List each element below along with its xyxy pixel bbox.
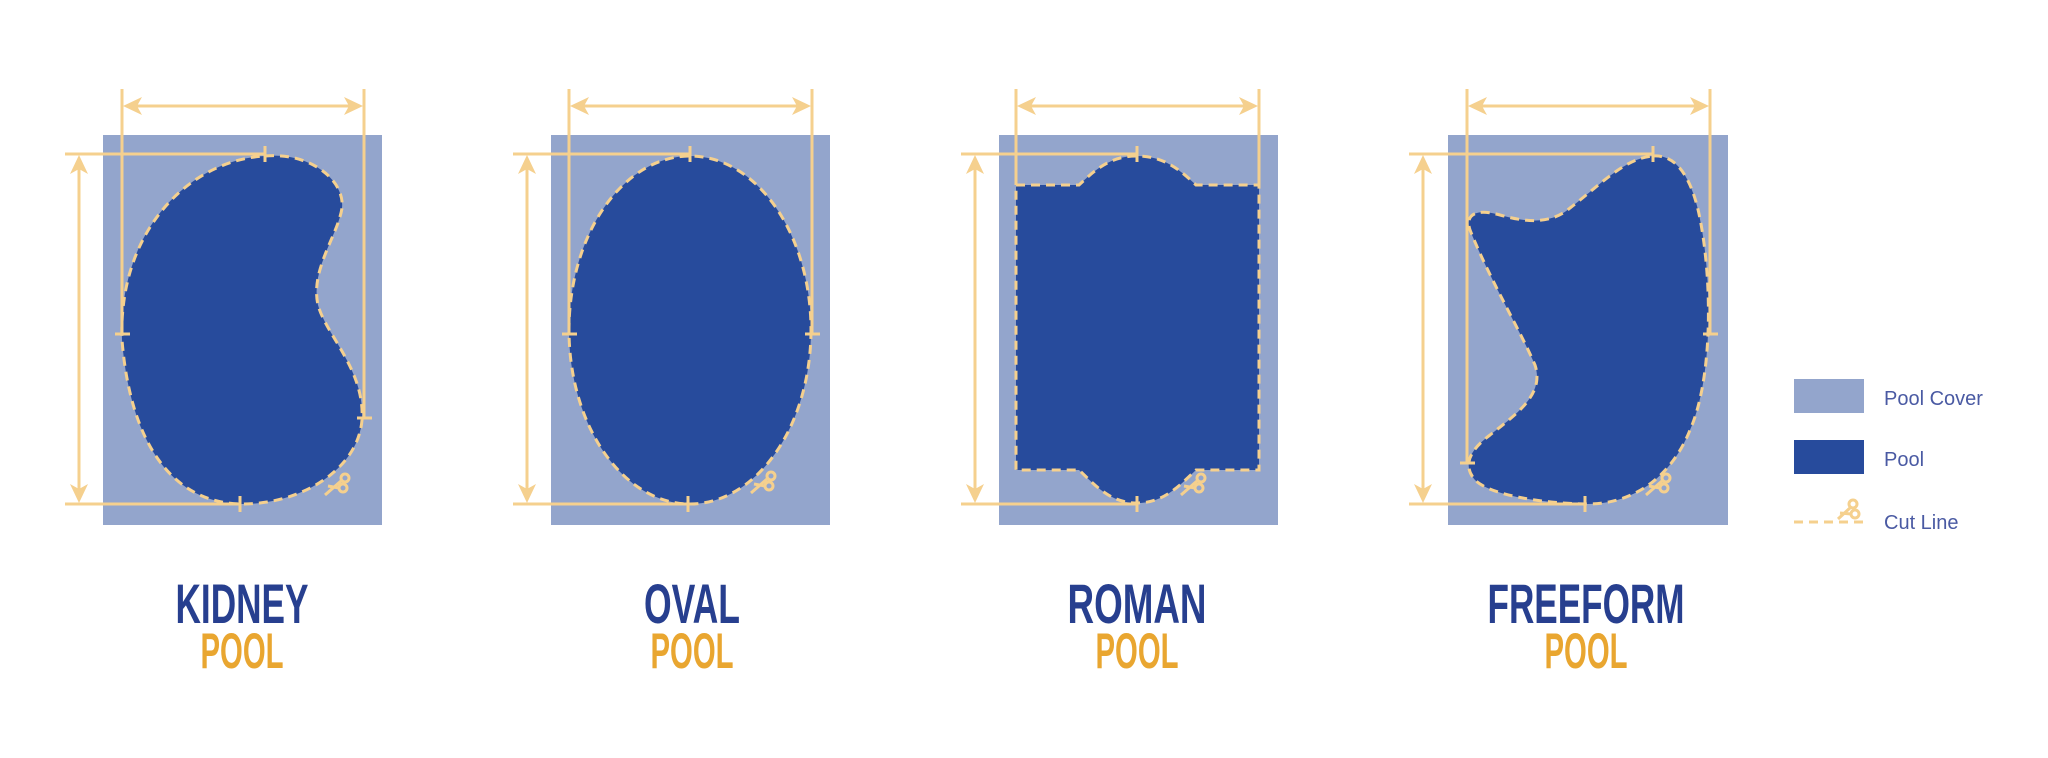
panel: kidney pool [65, 89, 382, 679]
cover rectangle [103, 135, 382, 525]
icon: scissors [1646, 474, 1670, 495]
roman pool shape [1016, 156, 1259, 503]
title: oval pool: POOL [650, 623, 734, 679]
oval pool shape [569, 156, 811, 504]
cover rectangle [1448, 135, 1728, 525]
title: oval pool [644, 572, 740, 679]
title: kidney pool: KIDNEY [176, 572, 308, 635]
title: oval pool: OVAL [644, 572, 740, 635]
width dimension arrow [1460, 89, 1718, 463]
legend: pool cover: Pool Cover [1884, 388, 1983, 410]
title: roman pool: POOL [1096, 623, 1178, 679]
legend: pool [1794, 440, 1924, 474]
legend: pool cover [1794, 379, 1983, 413]
height dimension arrow [65, 146, 265, 512]
icon: scissors [1181, 474, 1205, 495]
cover rectangle [551, 135, 830, 525]
width dimension arrow [115, 89, 372, 418]
title: freeform pool [1488, 572, 1684, 679]
height dimension arrow [961, 146, 1137, 512]
title: kidney pool: POOL [200, 623, 284, 679]
legend: cut line [1794, 500, 1958, 534]
legend [1794, 379, 1983, 534]
freeform pool shape [1469, 156, 1708, 504]
height dimension arrow [513, 146, 690, 512]
panel: oval pool [513, 89, 830, 679]
icon: scissors [751, 472, 775, 493]
title: roman pool: ROMAN [1068, 572, 1206, 635]
width dimension arrow [1016, 89, 1259, 185]
width dimension arrow [562, 89, 820, 334]
kidney pool shape [122, 156, 362, 504]
cover rectangle [999, 135, 1278, 525]
panel: freeform pool [1409, 89, 1728, 679]
title: freeform pool: FREEFORM [1488, 572, 1684, 635]
title: roman pool [1068, 572, 1206, 679]
title: kidney pool [176, 572, 308, 679]
legend: cut line: Cut Line [1884, 512, 1958, 534]
height dimension arrow [1409, 146, 1653, 512]
icon: scissors [325, 474, 349, 495]
title: freeform pool: POOL [1544, 623, 1628, 679]
legend: pool: Pool [1884, 449, 1924, 471]
panel: roman pool [961, 89, 1278, 679]
